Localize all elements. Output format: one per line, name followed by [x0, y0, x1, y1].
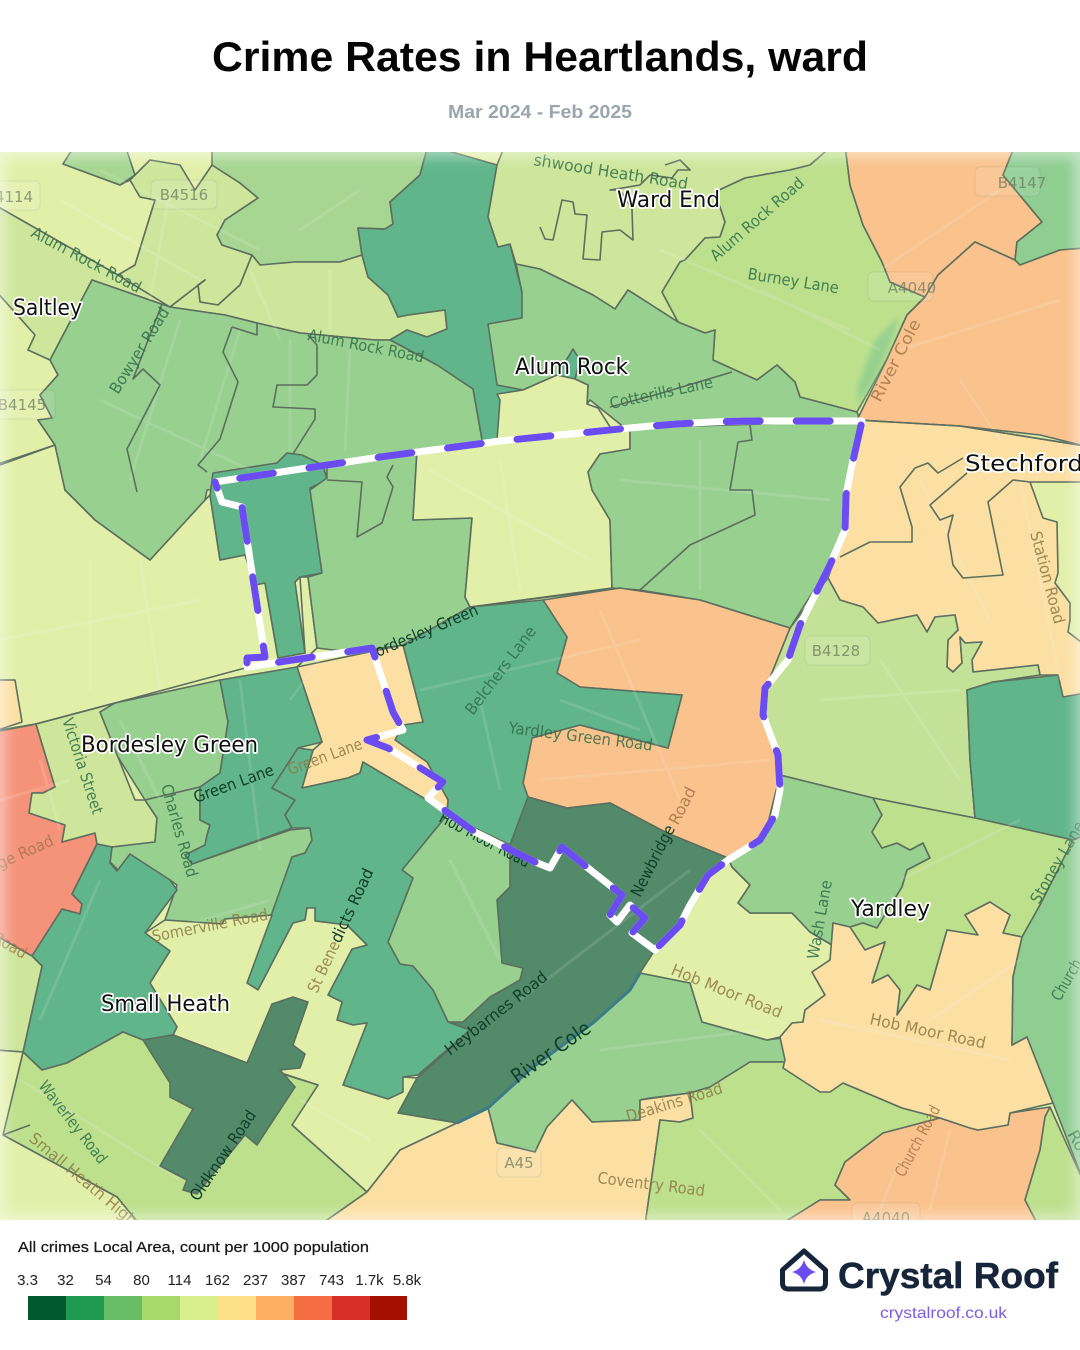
river cole green verge — [858, 315, 900, 405]
road name labels: Small Heath High — [25, 1129, 141, 1230]
road network — [0, 170, 1060, 1210]
icon: purple sparkle — [792, 1260, 816, 1284]
place name labels: Small Heath — [101, 992, 230, 1017]
road name labels: Road — [665, 784, 700, 828]
road name labels: Hob Moor Road — [436, 808, 533, 871]
website link: crystalroof.co.uk — [880, 1305, 1008, 1322]
legend value labels: 387 — [281, 1272, 306, 1289]
logo: Crystal Roof — [782, 1251, 1059, 1322]
road name labels: Hob Moor Road — [669, 960, 785, 1022]
road name labels: St Bene — [303, 938, 344, 996]
road name labels: Station Road — [1026, 529, 1069, 626]
place name labels: Ward End — [617, 188, 720, 213]
road number shields: A4040 — [862, 1209, 910, 1227]
district boundary lines — [0, 160, 1080, 1135]
road name labels: Newbridge — [627, 822, 679, 900]
river cole water edge — [457, 973, 640, 1123]
road name labels: Green Lane — [191, 760, 276, 807]
vignette — [0, 149, 1080, 1223]
legend value labels: 237 — [243, 1272, 268, 1289]
title: Crime Rates in Heartlands, ward — [212, 33, 868, 80]
road name labels: Alum Rock Road — [706, 173, 808, 265]
road number shields: A45 — [504, 1154, 534, 1172]
road number shields: B4147 — [998, 174, 1046, 192]
road name labels: Church Road — [891, 1102, 944, 1180]
legend value labels: 5.8k — [393, 1272, 422, 1289]
road name labels: Coventry Road — [597, 1168, 706, 1200]
road name labels: Yardley Green Road — [507, 718, 654, 755]
legend value labels — [17, 1272, 422, 1289]
place name labels: Saltley — [13, 296, 82, 321]
legend value labels: 743 — [319, 1272, 344, 1289]
legend value labels: 80 — [133, 1272, 150, 1289]
road name labels: Victoria Street — [58, 715, 107, 816]
ward boundary: Heartlands — [215, 421, 862, 950]
road name labels: Wash Lane — [803, 879, 836, 961]
wordmark: Crystal Roof — [838, 1255, 1059, 1296]
legend value labels: 162 — [205, 1272, 230, 1289]
legend — [17, 1239, 422, 1320]
place name labels: Stechford — [965, 452, 1080, 477]
icon: house outline — [782, 1251, 826, 1289]
road name labels: Heybarnes Road — [441, 967, 551, 1059]
road name labels: Alum Rock Road — [28, 223, 145, 297]
road name labels: Belchers Lane — [461, 622, 540, 718]
road number shields: A4040 — [888, 279, 936, 297]
legend value labels: 1.7k — [355, 1272, 384, 1289]
road number shields: B4128 — [812, 642, 860, 660]
road name labels: Oldknow Road — [186, 1107, 260, 1204]
choropleth areas — [0, 145, 1080, 1225]
road name labels: ordesley Green — [372, 600, 481, 661]
road name labels: River Cole — [867, 316, 924, 405]
legend value labels: 114 — [168, 1272, 191, 1289]
road name labels: dicts Road — [326, 865, 377, 946]
legend colour scale — [28, 1296, 407, 1320]
road name labels: Bowyer Road — [105, 304, 173, 397]
road name labels: Somerville Road — [150, 905, 270, 946]
road name labels: Green Lane — [285, 734, 365, 779]
subtitle: date range: Mar 2024 - Feb 2025 — [448, 102, 632, 122]
place name labels: Alum Rock — [515, 355, 628, 380]
road number shields — [0, 167, 1046, 1232]
road name labels: Cotterills Lane — [608, 372, 715, 413]
road name labels: Waverley Road — [35, 1077, 111, 1167]
road name labels: Alum Rock Road — [306, 325, 426, 366]
road name labels: Deakins Road — [624, 1078, 725, 1126]
legend title: All crimes Local Area, count per 1000 population — [18, 1239, 369, 1256]
place name labels: Yardley — [850, 897, 930, 922]
legend value labels: 3.3 — [17, 1272, 38, 1289]
road name labels: Burney Lane — [746, 264, 840, 297]
road number shields: B4516 — [160, 186, 208, 204]
road name labels: Hob Moor Road — [868, 1009, 988, 1052]
road name labels — [0, 150, 1080, 1230]
legend value labels: 54 — [95, 1272, 112, 1289]
legend value labels: 32 — [57, 1272, 74, 1289]
place name labels: Bordesley Green — [81, 733, 258, 758]
road name labels: River Cole — [506, 1016, 595, 1088]
road name labels: shwood Heath Road — [532, 150, 689, 193]
road name labels: Charles Road — [157, 782, 202, 879]
place name labels — [13, 188, 1080, 1017]
